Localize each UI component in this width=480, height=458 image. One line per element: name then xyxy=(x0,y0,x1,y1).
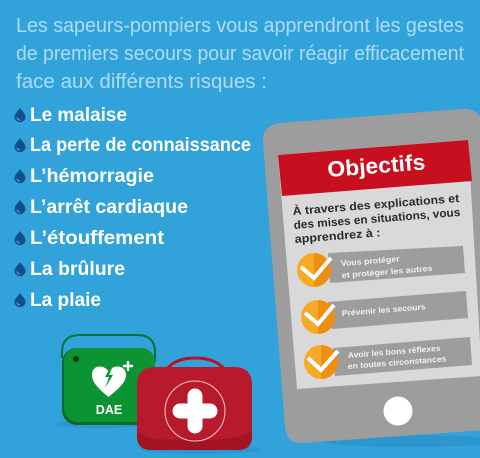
objective 3: en toutes circonstances xyxy=(347,354,447,371)
defibrillator case xyxy=(54,335,155,428)
phone xyxy=(263,109,480,447)
kit body xyxy=(137,367,252,450)
intro paragraph: des mises en situations, vous xyxy=(293,207,461,232)
item: la plaie: La plaie xyxy=(30,290,101,311)
objective 1: et protéger les autres xyxy=(341,264,433,280)
plus icon xyxy=(123,361,133,371)
DAE label: DAE xyxy=(96,403,122,417)
objective 2 xyxy=(301,291,468,334)
title: Objectifs xyxy=(326,149,426,182)
item: l'hémorragie: L’hémorragie xyxy=(30,166,154,187)
handle xyxy=(62,335,155,362)
case body xyxy=(62,348,155,425)
item: le malaise: Le malaise xyxy=(30,105,127,126)
intro text xyxy=(16,15,464,93)
first aid kit xyxy=(137,358,260,454)
objective 1: Vous protéger xyxy=(340,254,400,268)
intro paragraph: apprendrez à : xyxy=(294,227,381,246)
item: l'étouffement: L’étouffement xyxy=(30,228,165,249)
intro text: de premiers secours pour savoir réagir efficacement xyxy=(16,43,464,65)
red title band xyxy=(278,140,472,196)
heart icon xyxy=(92,366,126,397)
objective 1 xyxy=(297,246,465,287)
handle xyxy=(166,358,225,370)
phone screen xyxy=(278,140,480,389)
intro text: face aux différents risques : xyxy=(16,71,267,93)
objective 2: Prévenir les secours xyxy=(341,302,426,318)
intro text: Les sapeurs-pompiers vous apprendront les gestes xyxy=(16,15,464,37)
objective 3: Avoir les bons réflexes xyxy=(347,344,441,360)
phone body xyxy=(263,109,480,443)
item: l'arrêt cardiaque: L’arrêt cardiaque xyxy=(30,197,188,218)
item: la brûlure: La brûlure xyxy=(30,259,125,280)
cross emblem xyxy=(165,381,225,441)
list of risks xyxy=(14,105,251,311)
objective 3 xyxy=(304,337,472,379)
home button xyxy=(384,396,412,426)
item: la perte de connaissance: La perte de connaissance xyxy=(30,135,251,156)
intro paragraph: À travers des explications et xyxy=(292,192,460,218)
intro paragraph xyxy=(292,192,461,246)
